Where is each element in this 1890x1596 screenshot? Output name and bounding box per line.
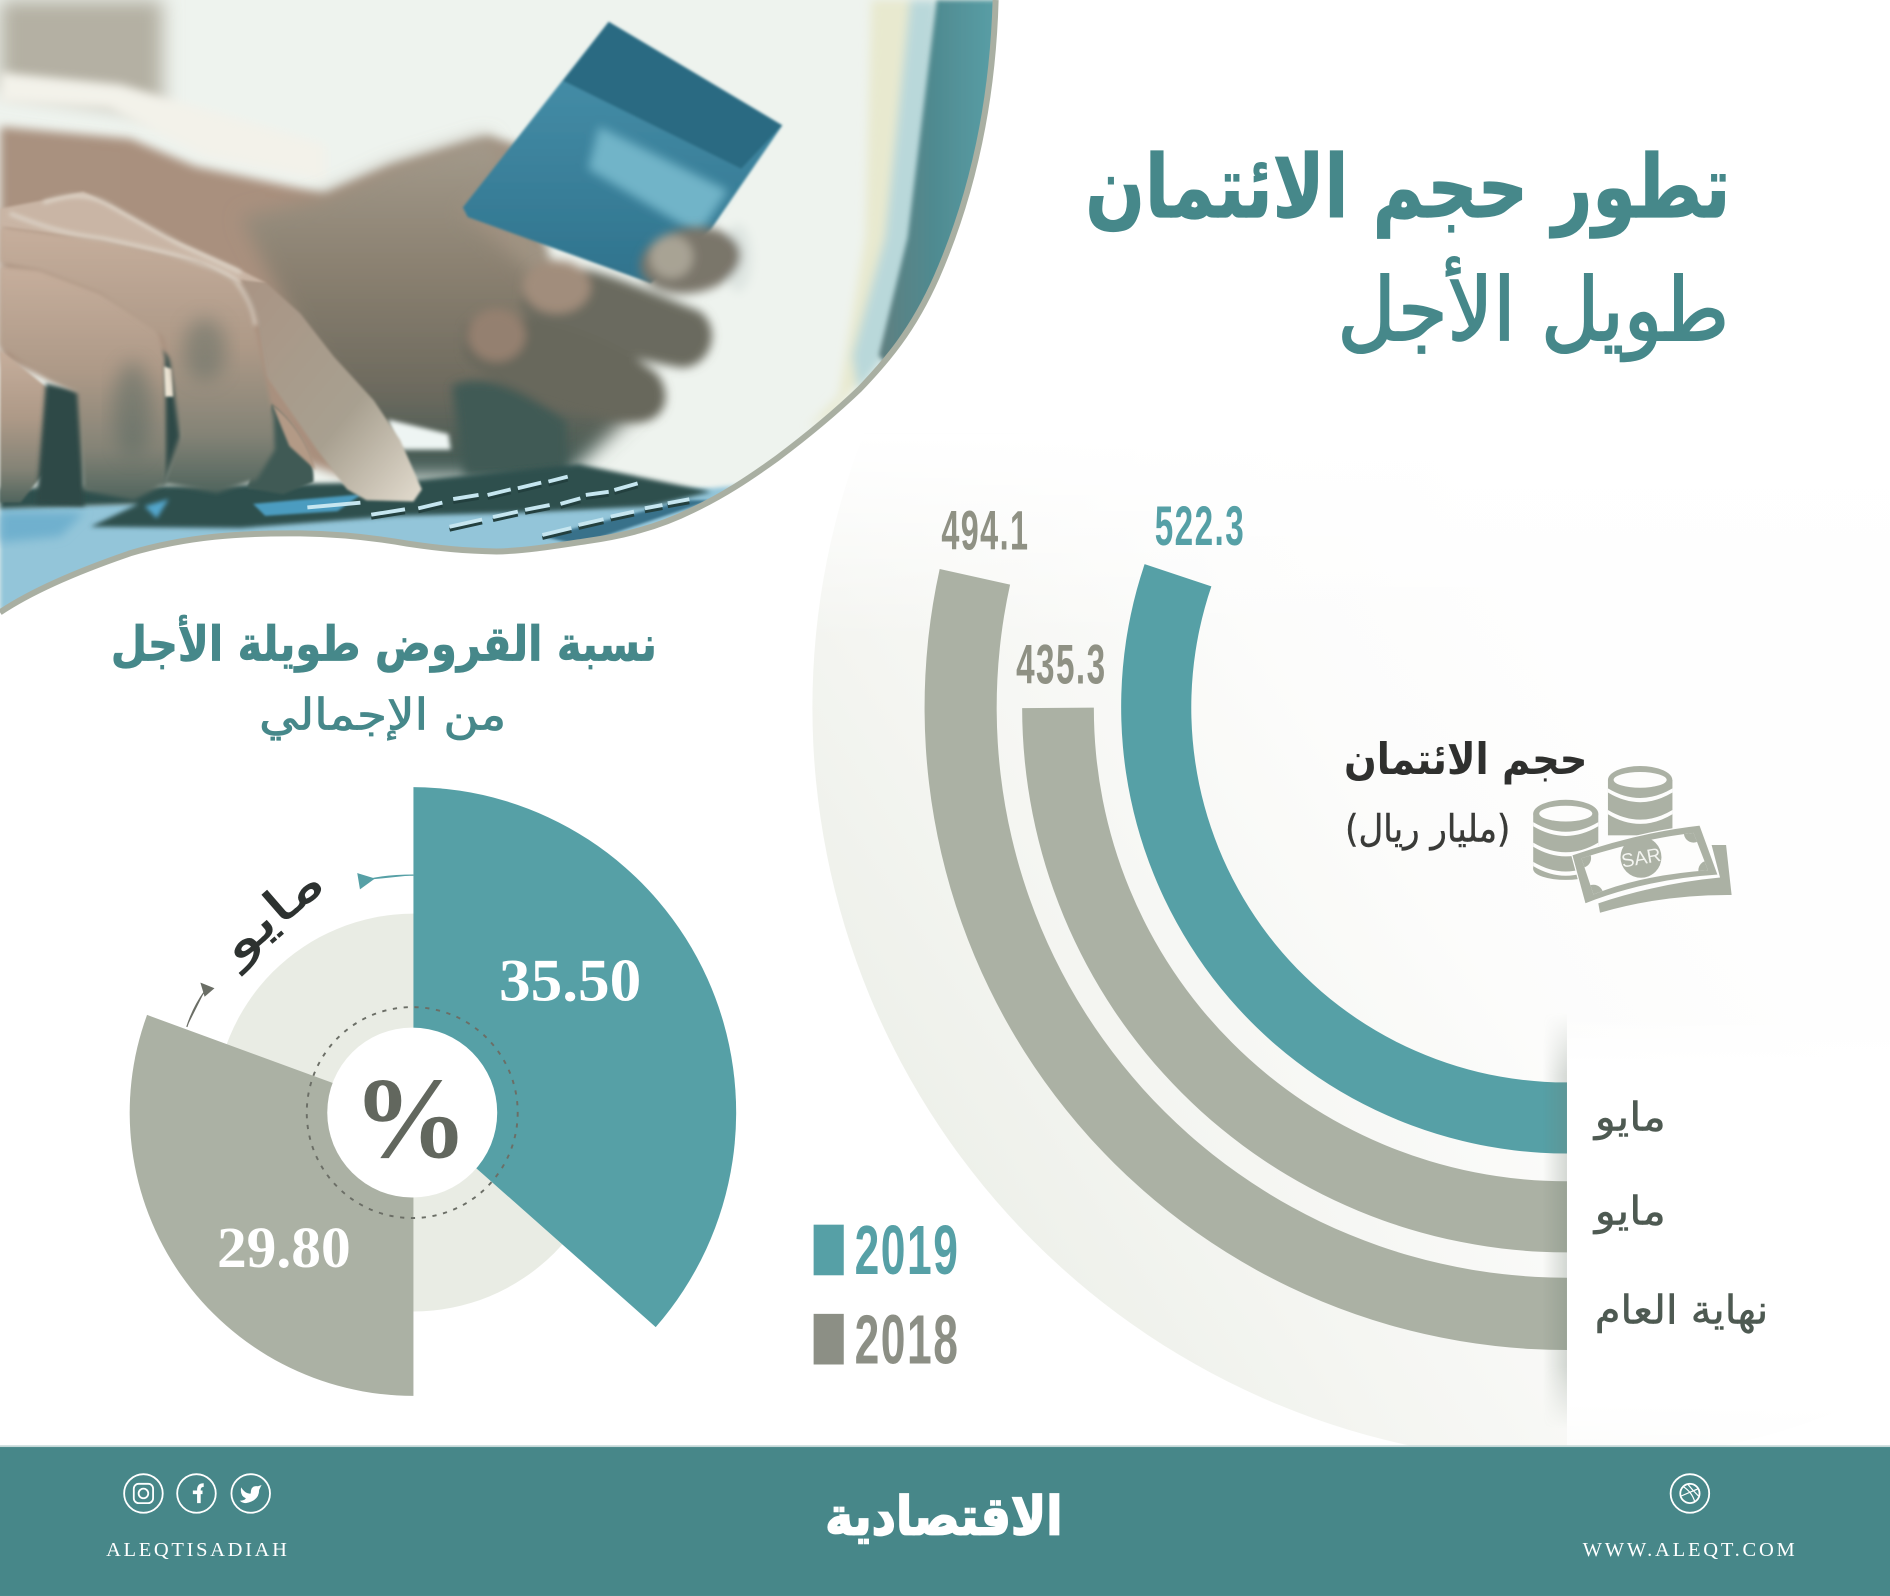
footer band	[0, 1445, 1890, 1596]
unit label: credit volume: (مليار ريال)	[1345, 806, 1510, 850]
keyboard keys	[307, 477, 689, 538]
value 29.80: 29.80	[217, 1215, 351, 1280]
light sliver between fingers	[164, 366, 174, 397]
window stripes at right	[808, 0, 938, 428]
arc chart: credit volume	[925, 495, 1890, 1446]
back coin stack	[1608, 766, 1672, 835]
sector 2018	[130, 1015, 413, 1396]
front banknote	[1572, 825, 1718, 904]
heading: long-term loans share: نسبة القروض طويلة الأجل	[111, 615, 657, 673]
value labels: 522.3	[1155, 495, 1245, 557]
credit card	[463, 22, 782, 283]
value labels: 435.3	[1016, 633, 1107, 695]
title: طويل الأجل	[1337, 257, 1729, 361]
back banknote	[1598, 845, 1732, 913]
title	[1085, 137, 1730, 361]
url text: WWW.ALEQT.COM	[1583, 1539, 1795, 1561]
back knuckle strip	[0, 192, 266, 283]
background glow behind arcs	[812, 552, 1567, 1445]
thumb under index	[247, 404, 314, 494]
period labels: مايو	[1593, 1095, 1666, 1141]
centre circle	[327, 1028, 497, 1198]
legend: 2019	[855, 1211, 959, 1289]
finger gaps	[36, 383, 84, 506]
percent symbol: %	[353, 1055, 468, 1183]
white reflection	[388, 419, 451, 450]
logo: الاقتصادية	[825, 1485, 1063, 1547]
blurred backdrop block	[0, 0, 163, 115]
middle finger	[0, 227, 275, 493]
arc: May 2019 522.3	[1121, 564, 1567, 1154]
legend	[814, 1211, 959, 1378]
period labels: مايو	[1593, 1189, 1666, 1235]
pie chart: loan share	[130, 787, 736, 1396]
social icons	[124, 1474, 270, 1513]
keyboard base	[0, 482, 771, 615]
index finger	[240, 280, 422, 501]
curved label: May	[187, 853, 413, 1027]
legend: 2018	[855, 1300, 959, 1378]
back hand	[241, 136, 651, 476]
ring finger	[0, 266, 166, 500]
unit label: credit volume: حجم الائتمان	[1344, 735, 1587, 785]
side shade	[1548, 1026, 1567, 1414]
value labels	[941, 495, 1245, 695]
arrow grey	[187, 984, 213, 1027]
front coin stack	[1533, 800, 1598, 880]
photo: hands with credit card and laptop	[0, 0, 1000, 615]
holding fingers	[452, 220, 752, 476]
handle text: ALEQTISADIAH	[106, 1539, 287, 1561]
icon: coins and banknote: SAR	[1620, 845, 1663, 873]
arc: May 2018 435.3	[1022, 708, 1567, 1252]
value labels: 494.1	[941, 500, 1029, 562]
curved label: May: مايو	[205, 853, 335, 976]
title: تطور حجم الائتمان	[1085, 137, 1730, 238]
heading: long-term loans share: من الإجمالي	[259, 690, 506, 740]
unit label: credit volume	[1344, 735, 1587, 850]
icon: coins and banknote	[1533, 766, 1732, 913]
pinky	[0, 350, 49, 503]
arc: end of year 2018 494.1	[925, 569, 1567, 1350]
period labels	[1593, 1095, 1768, 1334]
value 35.50: 35.50	[499, 947, 641, 1014]
white panel right of arcs	[1567, 1013, 1890, 1446]
sector 2019	[413, 787, 736, 1327]
period labels: نهاية العام	[1595, 1288, 1768, 1334]
forearm	[0, 127, 579, 482]
finger highlights	[10, 213, 256, 325]
heading: long-term loans share	[111, 615, 657, 740]
dribbble icon	[1671, 1474, 1709, 1513]
arrow teal	[358, 874, 413, 888]
